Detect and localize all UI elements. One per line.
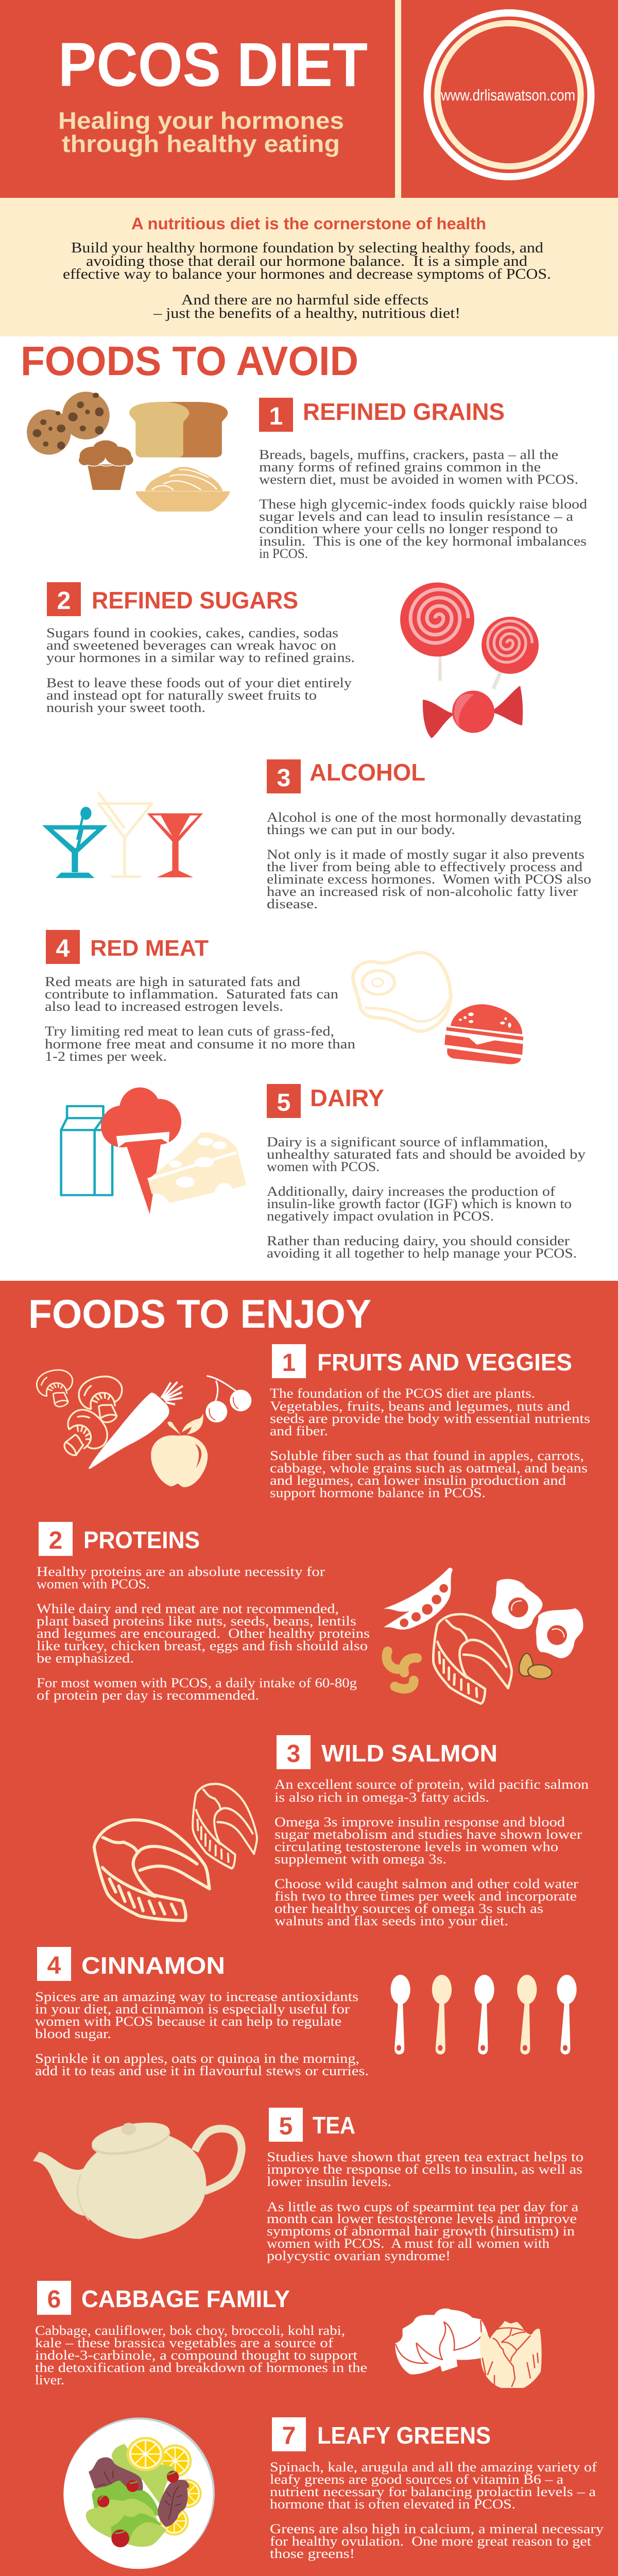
text: leafy greens: Greens are also high in calcium, a mineral necessary — [270, 2521, 604, 2536]
text: proteins: Healthy proteins are an absolute necessity for — [37, 1564, 325, 1579]
item 2: proteins — [37, 1522, 370, 1703]
text: leafy greens: those greens! — [270, 2546, 355, 2561]
text: proteins: plant based proteins like nuts, seeds, beans, lentils — [37, 1614, 356, 1629]
text: proteins: be emphasized. — [37, 1651, 134, 1666]
text: red meat: contribute to inflammation. Saturated fats can — [45, 987, 338, 1002]
panel: foods to enjoy — [0, 1281, 618, 2576]
item 4: cinnamon — [35, 1947, 369, 2078]
item 3: wild salmon — [274, 1735, 589, 1928]
text: refined sugars: nourish your sweet tooth. — [46, 700, 205, 715]
text: fruits and veggies — [270, 1386, 590, 1500]
text: tea: symptoms of abnormal hair growth (hirsutism) in — [267, 2224, 575, 2239]
website badge — [427, 13, 591, 177]
text: tea: women with PCOS. A must for all women with — [267, 2236, 550, 2251]
heading: fruits and veggies: FRUITS AND VEGGIES — [317, 1349, 572, 1376]
text: alcohol: have an increased risk of non-alcoholic fatty liver — [267, 884, 578, 899]
text: tea — [267, 2149, 583, 2263]
text: dairy: women with PCOS. — [267, 1159, 380, 1174]
heading: cabbage family: CABBAGE FAMILY — [81, 2285, 290, 2312]
text: tea: As little as two cups of spearmint tea per day for a — [267, 2199, 579, 2214]
heading: wild salmon: WILD SALMON — [321, 1740, 497, 1767]
item 4: red meat — [45, 930, 355, 1064]
text: refined sugars: your hormones in a similar way to refined grains. — [46, 650, 355, 665]
subtitle: through healthy eating — [62, 130, 340, 157]
text: refined sugars: Best to leave these foods out of your diet entirely — [46, 675, 352, 690]
text: proteins: of protein per day is recommended. — [37, 1688, 259, 1703]
panel: introduction — [0, 198, 618, 336]
text: red meat: Red meats are high in saturated fats and — [45, 974, 300, 989]
text: tea: polycystic ovarian syndrome! — [267, 2248, 451, 2263]
text: proteins: For most women with PCOS, a daily intake of 60-80g — [37, 1675, 357, 1690]
text: refined grains: insulin. This is one of the key hormonal imbalances — [259, 534, 587, 549]
text: fruits and veggies: cabbage, whole grains such as oatmeal, and beans — [270, 1461, 588, 1476]
text: dairy: Additionally, dairy increases the production of — [267, 1184, 555, 1199]
item 1: fruits and veggies — [270, 1344, 590, 1500]
intro text — [63, 240, 551, 321]
icon: fruits and vegetables — [37, 1370, 251, 1487]
text: refined grains: These high glycemic-index foods quickly raise blood — [259, 497, 587, 512]
text: alcohol: Not only is it made of mostly sugar it also prevents — [267, 847, 585, 862]
text: cabbage family: the detoxification and breakdown of hormones in the — [35, 2360, 367, 2375]
text: proteins: While dairy and red meat are not recommended, — [37, 1601, 339, 1616]
item 2: refined sugars: 2 — [57, 587, 71, 615]
text: dairy: Dairy is a significant source of inflammation, — [267, 1134, 548, 1149]
intro text: And there are no harmful side effects — [181, 292, 428, 308]
heading: cinnamon: CINNAMON — [81, 1952, 225, 1979]
text: alcohol — [267, 810, 591, 911]
text: proteins: like turkey, chicken breast, eggs and fish should also — [37, 1638, 368, 1653]
text: cabbage family: indole-3-carbinole, a compound thought to support — [35, 2348, 358, 2363]
item 5: dairy — [267, 1084, 586, 1261]
text: wild salmon: fish two to three times per week and incorporate — [274, 1889, 577, 1904]
text: leafy greens: leafy greens are good sources of vitamin B6 – a — [270, 2472, 564, 2487]
text: cabbage family: Cabbage, cauliflower, bok choy, broccoli, kohl rabi, — [35, 2323, 345, 2338]
heading: tea: TEA — [313, 2112, 355, 2139]
heading: red meat: RED MEAT — [90, 936, 209, 961]
item 7: leafy greens — [270, 2417, 604, 2561]
text: cinnamon: Spices are an amazing way to increase antioxidants — [35, 1989, 358, 2004]
item 5: tea: 5 — [279, 2113, 293, 2140]
text: alcohol: eliminate excess hormones. Women with PCOS also — [267, 872, 591, 887]
text: refined sugars: and instead opt for naturally sweet fruits to — [46, 688, 317, 703]
text: wild salmon: An excellent source of protein, wild pacific salmon — [274, 1777, 589, 1792]
text: fruits and veggies: and legumes, can lower insulin production and — [270, 1473, 566, 1488]
text: wild salmon: other healthy sources of omega 3s such as — [274, 1901, 543, 1916]
text: proteins: and legumes are encouraged. Other healthy proteins — [37, 1626, 370, 1641]
text: leafy greens — [270, 2460, 604, 2561]
text: alcohol: disease. — [267, 896, 318, 911]
item 2: proteins: 2 — [49, 1527, 62, 1554]
item 7: leafy greens: 7 — [282, 2422, 296, 2450]
text: alcohol: Alcohol is one of the most hormonally devastating — [267, 810, 581, 825]
text: refined sugars: Sugars found in cookies, cakes, candies, sodas — [46, 625, 338, 640]
text: refined grains: sugar levels and can lead to insulin resistance – a — [259, 509, 574, 524]
text: cinnamon: Sprinkle it on apples, oats or quinoa in the morning, — [35, 2051, 359, 2066]
text: cinnamon: add it to teas and use it in flavourful stews or curries. — [35, 2063, 369, 2078]
icon: teapot — [33, 2117, 242, 2239]
text: fruits and veggies: Soluble fiber such as that found in apples, carrots, — [270, 1448, 584, 1463]
item 4: red meat: 4 — [56, 935, 70, 962]
text: tea: Studies have shown that green tea extract helps to — [267, 2149, 583, 2164]
intro text: – just the benefits of a healthy, nutritious diet! — [153, 305, 460, 321]
text: wild salmon: walnuts and flax seeds into your diet. — [274, 1913, 508, 1928]
text: dairy: Rather than reducing dairy, you should consider — [267, 1233, 570, 1248]
text: leafy greens: Spinach, kale, arugula and all the amazing variety of — [270, 2460, 597, 2475]
subtitle — [58, 107, 344, 157]
icon: salad plate — [63, 2417, 215, 2569]
heading: alcohol: ALCOHOL — [310, 759, 425, 786]
text: alcohol: the liver from being able to effectively process and — [267, 859, 582, 874]
text: refined grains — [259, 447, 587, 561]
intro text: Build your healthy hormone foundation by selecting healthy foods, and — [71, 240, 544, 256]
text: refined grains: in PCOS. — [259, 546, 308, 561]
heading: refined sugars: REFINED SUGARS — [92, 587, 298, 614]
text: refined sugars: and sweetened beverages can wreak havoc on — [46, 638, 336, 653]
text: refined grains: western diet, must be avoided in women with PCOS. — [259, 472, 578, 487]
text: dairy: avoiding it all together to help manage your PCOS. — [267, 1246, 577, 1261]
heading: proteins: PROTEINS — [83, 1527, 200, 1553]
website badge: www.drlisawatson.com — [440, 86, 575, 104]
text: red meat: 1-2 times per week. — [45, 1049, 167, 1064]
text: alcohol: things we can put in our body. — [267, 822, 455, 837]
text: wild salmon: supplement with omega 3s. — [274, 1852, 447, 1867]
text: fruits and veggies: support hormone balance in PCOS. — [270, 1485, 486, 1500]
text: cabbage family: kale – these brassica vegetables are a source of — [35, 2335, 333, 2350]
intro text: avoiding those that derail our hormone balance. It is a simple and — [86, 253, 528, 269]
text: wild salmon: sugar metabolism and studies have shown lower — [274, 1827, 582, 1842]
title: PCOS DIET — [58, 29, 368, 99]
text: refined sugars — [46, 625, 355, 715]
text: dairy: insulin-like growth factor (IGF) which is known to — [267, 1196, 572, 1211]
text: dairy — [267, 1134, 586, 1261]
icon: cocktails — [42, 793, 203, 878]
item 4: cinnamon: 4 — [47, 1952, 61, 1979]
heading: dairy: DAIRY — [310, 1084, 384, 1111]
item 1: refined grains: 1 — [269, 403, 283, 430]
text: refined grains: many forms of refined grains common in the — [259, 460, 541, 474]
text: cinnamon — [35, 1989, 369, 2078]
text: wild salmon: Choose wild caught salmon and other cold water — [274, 1876, 578, 1891]
icon: lollipops and candy — [400, 582, 539, 738]
icon: proteins — [384, 1568, 583, 1704]
icon: salmon steaks — [84, 1784, 257, 1943]
text: red meat: also lead to increased estrogen levels. — [45, 999, 283, 1014]
text: tea: lower insulin levels. — [267, 2174, 391, 2189]
icon: refined grains illustration — [27, 392, 230, 512]
text: fruits and veggies: seeds are provide the body with essential nutrients — [270, 1411, 590, 1426]
text: cabbage family: liver. — [35, 2372, 64, 2387]
item 5: dairy: 5 — [277, 1089, 290, 1116]
text: wild salmon: circulating testosterone levels in women who — [274, 1839, 558, 1854]
panel: foods to avoid — [0, 336, 618, 1281]
text: refined grains: condition where your cells no longer respond to — [259, 521, 558, 536]
text: leafy greens: for healthy ovulation. One more great reason to get — [270, 2534, 592, 2549]
item 3: alcohol — [267, 759, 591, 911]
item 5: tea — [267, 2108, 583, 2263]
text: dairy: unhealthy saturated fats and should be avoided by — [267, 1147, 586, 1162]
heading: leafy greens: LEAFY GREENS — [317, 2422, 491, 2449]
text: cabbage family — [35, 2323, 367, 2387]
heading: refined grains: REFINED GRAINS — [303, 398, 505, 425]
text: wild salmon: is also rich in omega-3 fatty acids. — [274, 1790, 489, 1805]
text: refined grains: Breads, bagels, muffins, crackers, pasta – all the — [259, 447, 558, 462]
item 1: refined grains — [259, 398, 587, 561]
text: tea: month can lower testosterone levels and improve — [267, 2211, 577, 2226]
text: fruits and veggies: Vegetables, fruits, beans and legumes, nuts and — [270, 1399, 570, 1414]
item 1: fruits and veggies: 1 — [282, 1349, 296, 1377]
text: leafy greens: hormone that is often elevated in PCOS. — [270, 2497, 516, 2512]
text: cinnamon: women with PCOS because it can help to regulate — [35, 2014, 341, 2029]
text: fruits and veggies: and fiber. — [270, 1423, 328, 1438]
item 6: cabbage family: 6 — [47, 2286, 61, 2313]
subtitle: Healing your hormones — [58, 107, 344, 134]
text: fruits and veggies: The foundation of the PCOS diet are plants. — [270, 1386, 535, 1401]
item 2: refined sugars — [46, 582, 355, 715]
item 3: alcohol: 3 — [277, 765, 290, 792]
text: dairy: negatively impact ovulation in PCOS. — [267, 1209, 494, 1224]
panel: header — [0, 0, 618, 198]
icon: cabbages — [395, 2309, 542, 2388]
foods to avoid heading: FOODS TO AVOID — [21, 338, 358, 384]
text: cinnamon: in your diet, and cinnamon is especially useful for — [35, 2002, 350, 2016]
text: red meat: Try limiting red meat to lean cuts of grass-fed, — [45, 1024, 334, 1039]
item 3: wild salmon: 3 — [287, 1740, 300, 1768]
text: proteins — [37, 1564, 370, 1703]
icon: spoons — [390, 1975, 577, 2055]
intro heading: A nutritious diet is the cornerstone of health — [131, 214, 486, 233]
text: proteins: women with PCOS. — [37, 1577, 150, 1591]
text: tea: improve the response of cells to insulin, as well as — [267, 2162, 582, 2177]
icon: steak and burger — [353, 953, 523, 1064]
text: wild salmon — [274, 1777, 589, 1928]
intro text: effective way to balance your hormones and decrease symptoms of PCOS. — [63, 266, 551, 282]
item 6: cabbage family — [35, 2281, 367, 2387]
icon: milk, ice cream and cheese — [61, 1088, 246, 1214]
text: wild salmon: Omega 3s improve insulin response and blood — [274, 1815, 565, 1829]
text: leafy greens: nutrient necessary for balancing prolactin levels – a — [270, 2484, 596, 2499]
text: red meat — [45, 974, 355, 1064]
foods to enjoy heading: FOODS TO ENJOY — [28, 1291, 371, 1336]
text: cinnamon: blood sugar. — [35, 2026, 111, 2041]
text: red meat: hormone free meat and consume it no more than — [45, 1037, 355, 1052]
